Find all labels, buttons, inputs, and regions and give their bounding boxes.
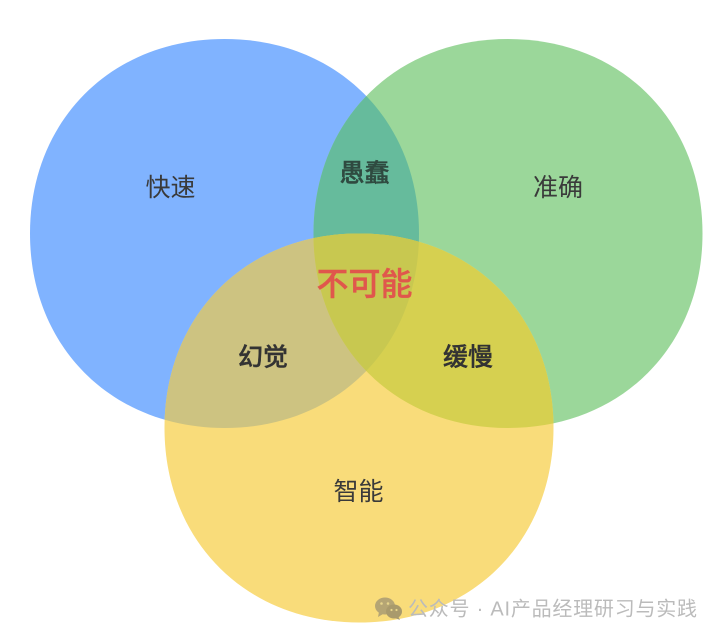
label: 准确: 准确	[533, 174, 583, 202]
overlap: center of all three	[314, 234, 419, 370]
overlap: blue and green	[314, 96, 419, 242]
label: 不可能: 不可能	[316, 266, 413, 302]
watermark text: 公众号 · AI产品经理研习与实践	[408, 598, 697, 620]
label: 缓慢: 缓慢	[443, 344, 493, 372]
overlap: green and yellow	[314, 234, 554, 428]
label: 愚蠢: 愚蠢	[339, 160, 390, 188]
label: 快速: 快速	[145, 174, 196, 202]
label: 幻觉: 幻觉	[238, 344, 288, 372]
circle: 快速 (blue)	[30, 39, 419, 428]
label: 智能: 智能	[333, 478, 384, 506]
circle: 智能 (yellow)	[164, 234, 554, 622]
overlap: blue and yellow	[164, 234, 418, 428]
icon: wechat watermark	[375, 598, 402, 620]
circle: 准确 (green)	[314, 39, 702, 428]
